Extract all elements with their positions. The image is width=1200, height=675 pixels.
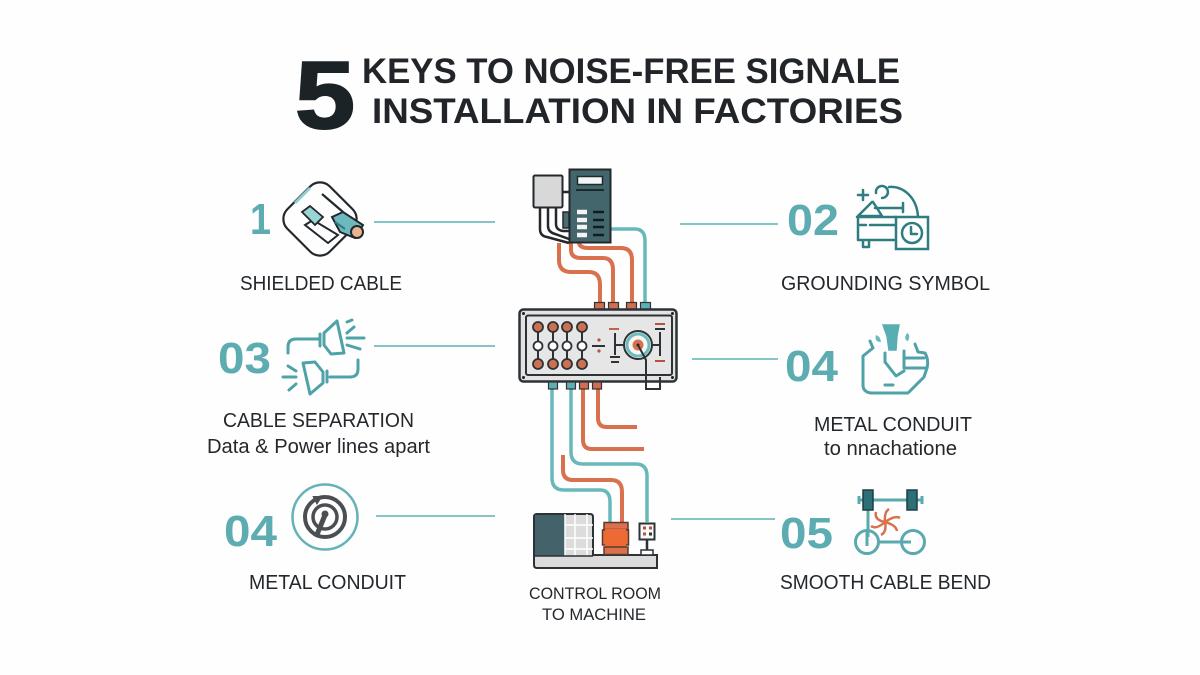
number 02: 02	[787, 196, 839, 245]
title: KEYS TO NOISE-FREE SIGNALE	[362, 52, 900, 91]
connector line 2	[680, 223, 778, 225]
icon: cable separation	[283, 320, 364, 394]
item 4 right: metal conduit	[692, 325, 972, 460]
connector line 5	[671, 518, 775, 520]
number 04 right: 04	[785, 342, 839, 391]
bottom connectors	[548, 382, 602, 389]
connector line 4 left	[376, 515, 495, 517]
label 3: Data & Power lines apart	[207, 436, 430, 458]
icon: grounding	[857, 186, 928, 249]
item 1: shielded cable	[240, 177, 495, 295]
title: INSTALLATION IN FACTORIES	[372, 92, 903, 131]
title	[295, 42, 903, 149]
actuator	[602, 522, 628, 554]
small control panel	[640, 524, 654, 555]
machine	[534, 514, 657, 568]
divide symbol	[592, 338, 605, 353]
ground symbols	[609, 324, 665, 362]
label 4 left: METAL CONDUIT	[249, 572, 406, 594]
item 3: cable separation	[207, 320, 495, 458]
label 3	[207, 410, 430, 458]
center wiring diagram	[520, 170, 676, 624]
number 03: 03	[218, 334, 271, 383]
number 1: 1	[250, 195, 271, 244]
control cabinet	[534, 170, 610, 242]
number 04 left: 04	[224, 507, 278, 556]
terminal rows	[533, 322, 587, 369]
connector line 1	[374, 221, 495, 223]
wires: control cabinet to junction box	[540, 207, 645, 302]
item 5: smooth cable bend	[671, 490, 991, 594]
label: control room to machine	[529, 584, 661, 624]
icon: conduit hand	[863, 325, 928, 393]
ring terminal	[624, 331, 652, 359]
label 2: GROUNDING SYMBOL	[781, 273, 990, 295]
item 2: grounding symbol	[680, 186, 990, 295]
label 1: SHIELDED CABLE	[240, 273, 402, 295]
connector line 3	[374, 345, 495, 347]
number 05: 05	[780, 509, 833, 558]
ground lead	[638, 345, 660, 389]
connector line 4 right	[692, 358, 778, 360]
icon: shielded cable	[278, 177, 363, 261]
title: 5	[295, 42, 355, 149]
label 4 right: METAL CONDUIT	[814, 414, 972, 436]
label 4 right: to nnachatione	[824, 438, 957, 460]
item 4 left: metal conduit	[224, 484, 495, 594]
wires: junction box to machine	[552, 389, 647, 522]
label: control room to machine: TO MACHINE	[542, 605, 646, 624]
icon: conduit circle	[292, 484, 358, 550]
label: control room to machine: CONTROL ROOM	[529, 584, 661, 603]
label 3: CABLE SEPARATION	[223, 410, 414, 432]
top connectors	[594, 302, 650, 310]
label 4 right	[814, 414, 972, 460]
label 5: SMOOTH CABLE BEND	[780, 572, 991, 594]
junction box	[520, 310, 676, 382]
icon: cable bend	[856, 490, 924, 554]
